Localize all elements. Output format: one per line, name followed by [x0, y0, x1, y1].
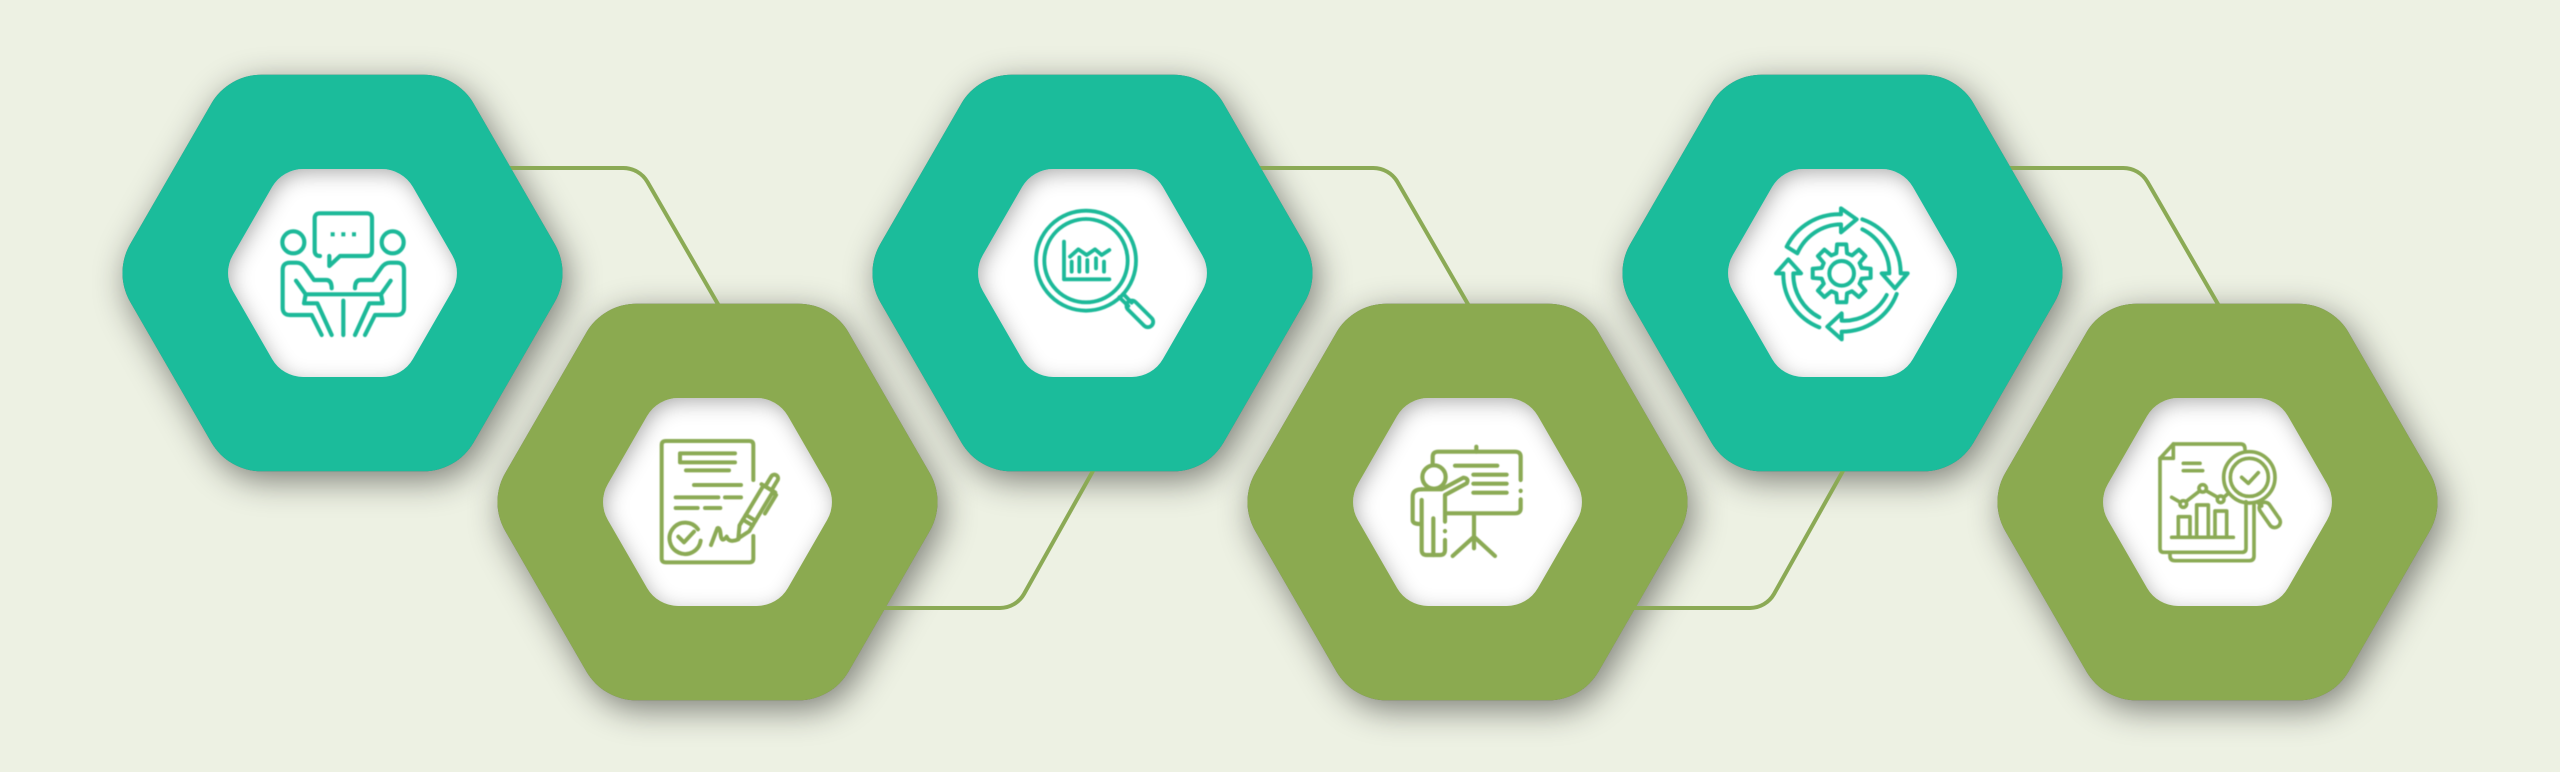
icon: presenter at a board: [1413, 447, 1521, 556]
connectors between hexagons: [450, 168, 2230, 608]
panel: hexagon 3 analysis: [872, 75, 1313, 471]
arrow: connector step 5 to 4: [1610, 453, 1853, 608]
arrow: connector step 3 to 2: [860, 453, 1103, 608]
icon: two people talking at a table: [282, 213, 404, 335]
panel: hexagon 2 signed document: [497, 304, 938, 700]
icon: report with magnifier and check: [2160, 444, 2283, 561]
icon: contract with pen: [662, 441, 785, 562]
arrow: connector step 3 to 4: [1200, 168, 1480, 325]
icon: magnifier over chart: [1036, 211, 1155, 329]
hexagon drop shadows: [122, 75, 2438, 700]
arrow: connector step 1 to 2: [450, 168, 730, 325]
panel: hexagon 5 process cycle: [1622, 75, 2063, 471]
panel: hexagon 4 presentation: [1247, 304, 1688, 700]
icon: gear with circular arrows: [1776, 208, 1908, 339]
panel: hexagon 6 report review: [1997, 304, 2438, 700]
arrow: connector step 5 to 6: [1950, 168, 2230, 325]
panel: hexagon 1 discussion: [122, 75, 563, 471]
